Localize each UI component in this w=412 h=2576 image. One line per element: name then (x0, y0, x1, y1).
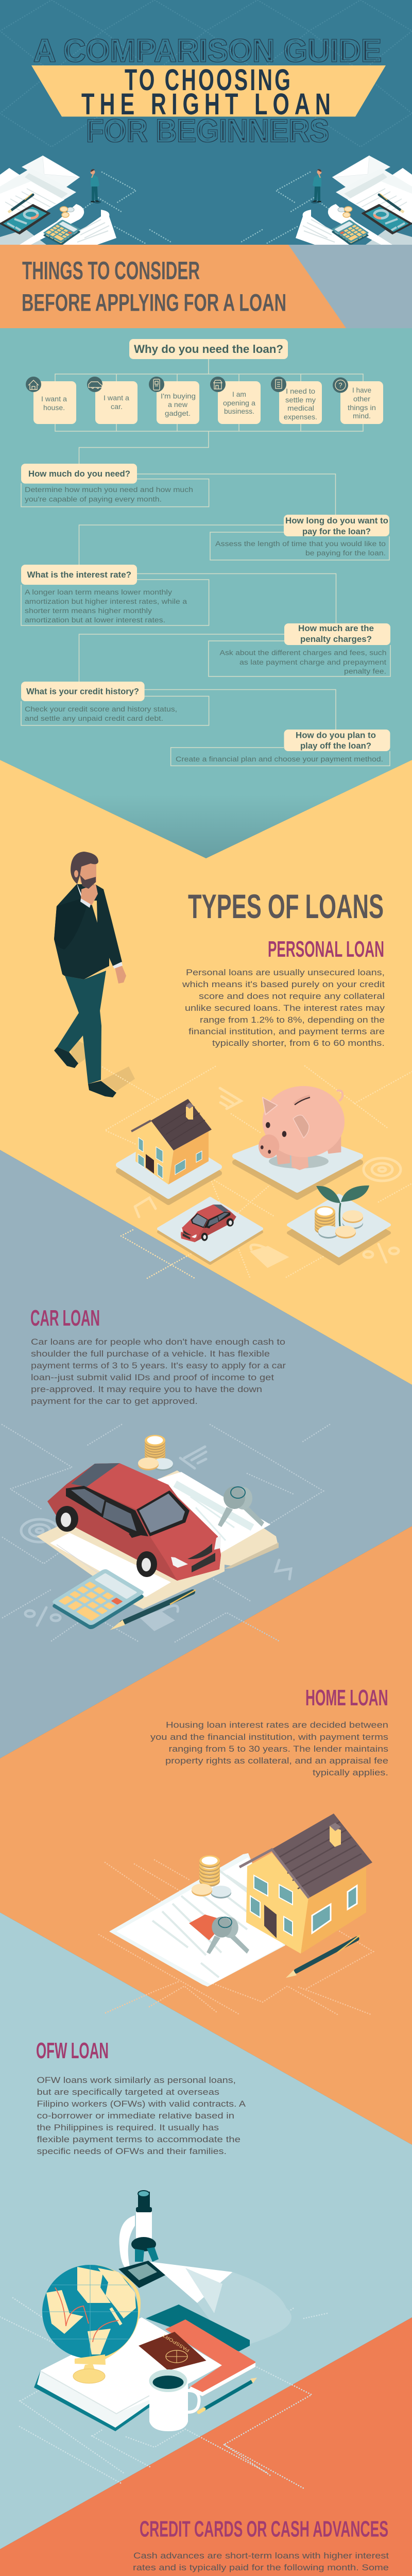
coins (67, 207, 74, 212)
icon: nodes (276, 1560, 291, 1579)
jacket (54, 884, 122, 979)
question: how long (284, 515, 389, 536)
answer: plan to pay: Create a financial plan and choose your payment method. (176, 755, 383, 763)
answer: interest rate: shorter term means higher monthly (25, 607, 152, 615)
option: gadget (157, 381, 199, 424)
answer: penalty charges: penalty fee. (344, 668, 386, 675)
question: plan to pay: play off the loan? (300, 741, 371, 751)
icon: padlock (142, 1605, 178, 1630)
option: gadget: gadget. (165, 409, 191, 417)
shoes (54, 1047, 78, 1068)
hero faint dotted lattice (0, 0, 412, 147)
faint icons on yellow (135, 1088, 401, 1266)
envelope left (0, 168, 26, 198)
answer: penalty charges: Ask about the different charges and fees, such (219, 649, 386, 656)
text: personal loan: financial institution, and payment terms are (188, 1026, 385, 1037)
house walls (135, 1121, 174, 1184)
icon: arrow chevrons (220, 1088, 241, 1109)
home loan dotted lattice (99, 1860, 373, 2014)
option: other: I have (352, 386, 371, 394)
icon: percent (364, 1244, 399, 1262)
receipts (20, 204, 84, 245)
option: business: opening a (223, 399, 255, 407)
icon: shop (210, 377, 226, 392)
answer: interest rate: A longer loan term means lower monthly (25, 588, 172, 596)
text: personal loan: which means it's based purely on your credit (182, 979, 385, 989)
passport: PASSPORT (162, 2332, 191, 2353)
globe (42, 2265, 139, 2383)
answer: interest rate (25, 588, 187, 624)
answer: how long: be paying for the loan. (305, 549, 386, 557)
hand (115, 966, 126, 984)
heading: BEFORE APPLYING FOR A LOAN (22, 289, 286, 316)
illustration: paperwork left (0, 156, 172, 245)
answer: penalty charges: as late payment charge and prepayment (239, 658, 386, 666)
keys (207, 1917, 249, 1954)
calculator (43, 222, 81, 245)
calculator (51, 1568, 145, 1630)
answer: interest rate: amortization but at lower interest rates. (25, 616, 165, 624)
text: ofw loan (37, 2075, 246, 2156)
option: other: mind. (353, 412, 371, 420)
question: plan to pay: How do you plan to (296, 731, 376, 740)
title line 2: TO CHOOSING (125, 63, 293, 97)
question: interest rate (21, 565, 137, 585)
text: car loan (31, 1337, 286, 1406)
text: car loan: payment terms of 3 to 5 years. It's easy to apply for a car (31, 1361, 286, 1370)
question: penalty charges: penalty charges? (300, 634, 372, 644)
text: credit cards: Cash advances are short-term loans with higher interest (133, 2551, 389, 2561)
light beam (150, 2262, 233, 2303)
answer: how long (215, 540, 386, 557)
answer: penalty charges (219, 649, 386, 675)
icon: phone (149, 377, 164, 392)
heading (22, 257, 286, 316)
flowchart connectors (21, 359, 390, 766)
option: gadget: I'm buying (161, 392, 196, 400)
car loan dotted lattice (2, 1425, 330, 1642)
teal book (146, 2304, 250, 2351)
text: personal loan: typically shorter, from 6 to 60 months. (212, 1038, 385, 1048)
icon: question (333, 377, 348, 393)
answer: how much: Determine how much you need and how much (25, 486, 193, 494)
option: business (218, 381, 261, 424)
answer: how much (25, 486, 193, 503)
phone (0, 205, 50, 234)
passport (139, 2332, 206, 2370)
text: home loan: property rights as collateral, and an appraisal fee (165, 1756, 388, 1766)
section: things to consider banner (0, 245, 412, 328)
text: ofw loan: flexible payment terms to accommodate the (37, 2134, 241, 2144)
open book (34, 2317, 222, 2431)
text: ofw loan: OFW loans work similarly as personal loans, (37, 2075, 236, 2085)
hand at chin (81, 884, 98, 905)
answer: interest rate: amortization but higher interest rates, while a (25, 598, 187, 605)
question: how long: How long do you want to (285, 516, 388, 526)
option cards (26, 377, 383, 424)
icon: padlock (251, 1245, 286, 1266)
text: home loan: ranging from 5 to 30 years. The lender maintains (169, 1744, 388, 1754)
illustration: house platform (118, 1099, 219, 1202)
text: credit cards (133, 2551, 389, 2576)
illustration: thinking man (54, 852, 135, 1097)
icon: clipboard (271, 377, 286, 392)
answer: credit history (25, 705, 177, 722)
option: medical: medical (287, 404, 314, 412)
option: business: business. (224, 407, 254, 415)
illustration: paperwork right (240, 156, 412, 245)
question: how much do you need (21, 464, 137, 484)
text: car loan: loan--just submit valid IDs and proof of income to get (31, 1372, 274, 1382)
icon: question: ? (338, 381, 342, 389)
option: other: things in (348, 403, 376, 412)
option: other (340, 381, 383, 424)
illustration: car on folder (37, 1435, 279, 1630)
option: house: house. (43, 403, 65, 412)
pen (11, 195, 33, 210)
option: car: I want a (104, 394, 129, 402)
question: why do you need the loan: Why do you need the loan? (134, 343, 283, 355)
illustration: car platform (159, 1198, 262, 1263)
question: penalty charges: How much are the (298, 623, 374, 633)
icon: target (21, 1519, 58, 1542)
option: medical (279, 381, 322, 424)
option: house: I want a (41, 395, 67, 403)
option: medical: expenses. (284, 413, 317, 421)
light cone (197, 2272, 291, 2349)
keys (218, 1486, 264, 1527)
personal loan dotted lattice (102, 1066, 412, 1278)
question: credit history: What is your credit history? (26, 686, 139, 697)
answer: how long: Assess the length of time that you would like to (215, 540, 386, 548)
answer: credit history: Check your credit score and history status, (25, 705, 177, 713)
trousers (57, 971, 106, 1084)
text: ofw loan: but are specifically targeted at overseas (37, 2087, 219, 2097)
icon: bars (180, 1447, 206, 1468)
folder (37, 1470, 279, 1609)
plant (316, 1185, 369, 1226)
text: ofw loan: the Philippines is required. It usually has (37, 2123, 219, 2132)
text: car loan: Car loans are for people who don't have enough cash to (31, 1337, 285, 1347)
house roof (151, 1099, 212, 1150)
text: ofw loan: Filipino workers (OFWs) with valid contracts. A (37, 2099, 246, 2109)
house (239, 1814, 372, 1954)
text: credit cards: rates and is typically paid for the following month. Some (133, 2563, 389, 2572)
text: personal loan (182, 968, 385, 1048)
question: penalty charges (284, 623, 390, 645)
text: personal loan: unlike secured loans. The interest rates may (185, 1003, 385, 1013)
title line 1: A COMPARISON GUIDE (33, 33, 382, 69)
question: why do you need the loan (129, 339, 288, 359)
question: how long: pay for the loan? (302, 527, 371, 536)
text: personal loan: Personal loans are usually unsecured loans, (186, 968, 385, 977)
document (0, 168, 76, 227)
paper (109, 1853, 285, 1987)
question: credit history (21, 682, 145, 701)
mug (149, 2369, 199, 2431)
icon: car (87, 377, 102, 392)
ofw loan dotted lattice (0, 2298, 328, 2488)
coin stack (315, 1206, 335, 1234)
person (91, 169, 101, 204)
title (31, 33, 386, 149)
coin stack (138, 1435, 173, 1471)
house tag (189, 1914, 226, 1940)
heading: car loan: CAR LOAN (30, 1306, 100, 1331)
question: plan to pay (284, 730, 390, 751)
answer: credit history: and settle any unpaid credit card debt. (25, 715, 163, 722)
banner (31, 65, 386, 116)
answer: how much: you're capable of paying every month. (25, 496, 162, 503)
text: car loan: payment for the car to get approved. (31, 1396, 198, 1406)
option: house (33, 381, 76, 424)
option: car (95, 381, 138, 424)
icon: percent (25, 1607, 60, 1625)
text: personal loan: range from 1.2% to 8%, depending on the (200, 1015, 385, 1025)
heading: THINGS TO CONSIDER (22, 257, 200, 285)
text: car loan: shoulder the full purchase of a vehicle. It has flexible (31, 1349, 270, 1359)
text: ofw loan: co-borrower or immediate relative based in (37, 2111, 234, 2121)
heading: ofw loan: OFW LOAN (36, 2038, 109, 2063)
pencil (199, 2378, 257, 2412)
pen (286, 1935, 360, 1978)
coin stack (192, 1855, 231, 1899)
option: medical: I need to (286, 387, 315, 395)
pen (110, 1590, 196, 1630)
option: business: I am (232, 390, 246, 398)
icon: nodes (135, 1198, 156, 1217)
text: home loan: you and the financial institution, with payment terms (150, 1732, 388, 1742)
documents (158, 1472, 270, 1553)
option: car: car. (111, 402, 123, 411)
option: other: other (353, 395, 370, 403)
icon: target (364, 1158, 401, 1181)
text: home loan: Housing loan interest rates are decided between (166, 1720, 388, 1730)
question: interest rate: What is the interest rate? (27, 570, 131, 580)
text: ofw loan: specific needs of OFWs and their families. (37, 2146, 227, 2156)
illustration: piggy platform (235, 1086, 360, 1197)
illustration: coins and plant platform (288, 1185, 389, 1264)
title line 4: FOR BEGINNERS (86, 113, 329, 149)
question: how much do you need: How much do you need? (28, 469, 130, 479)
head (79, 861, 96, 889)
red notebook (165, 2319, 255, 2396)
microscope (118, 2191, 165, 2288)
icon: house (26, 377, 41, 392)
section: hero background (0, 0, 412, 245)
text: home loan (150, 1720, 388, 1777)
illustration: house and keys (109, 1814, 372, 1987)
envelope back (22, 156, 80, 190)
faint icons on blue (21, 1447, 291, 1630)
option: gadget: a new (168, 400, 188, 409)
text: car loan: pre-approved. It may require you to have the down (31, 1384, 262, 1394)
option: medical: settle my (285, 396, 316, 404)
text: home loan: typically applies. (313, 1768, 388, 1777)
text: personal loan: score and does not require any collateral (199, 991, 385, 1001)
band under (0, 229, 46, 245)
illustration: globe books microscope (34, 2191, 291, 2431)
